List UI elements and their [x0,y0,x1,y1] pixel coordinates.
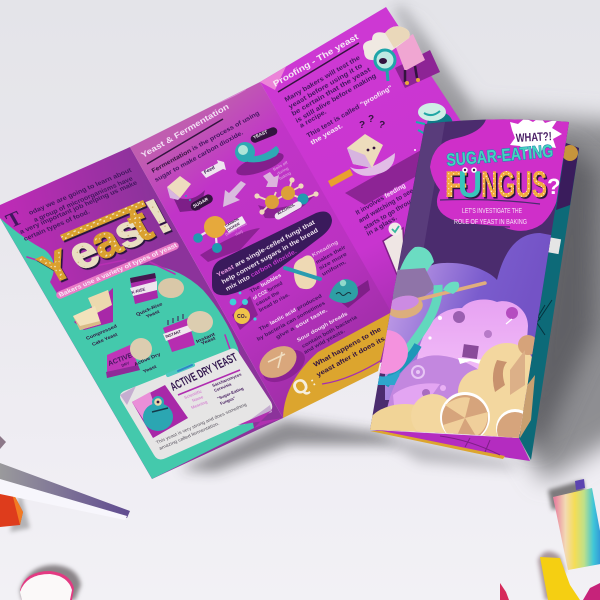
decorative magenta strokes [27,257,232,355]
text: sour dough: contain both bacteria [301,315,358,350]
fermentation text: sugar to make carbon dioxide. [153,129,245,184]
subtitle: LET'S INVESTIGATE THE [462,206,522,215]
icon: carbon dioxide molecule: rise) [234,229,244,237]
proofing text: yeast before using it to [288,62,364,111]
intro text: a very important job helping us make [18,179,139,236]
icon: dough and rolling pin [285,255,320,289]
label: instant [195,331,217,346]
text: feeding: It involves feeding [355,182,407,217]
icon: quick-rise jar [130,273,184,304]
panel: yeast and fermentation (middle) [130,82,412,418]
banner: question: yeast after it does its [315,335,387,379]
icon: carbon dioxide molecule: CARBON [225,217,240,228]
text: lactic acid: The lactic acid produced [258,293,323,333]
title: question mark: ? [547,174,560,199]
prop: pink gummy [583,583,600,600]
title: fungus: F [444,164,468,205]
text: lactic acid: by bacteria can sometimes [256,300,327,343]
prop: small candy fragment [0,436,6,449]
icon: active dry yeast packet [106,338,152,378]
prop: marshmallow [20,565,81,600]
title: Yeast!: t [118,197,161,252]
cover sky [385,233,556,400]
panel: yeast intro (left) [0,147,283,479]
label: compressed: Compressed [85,323,118,341]
text: kneading: size more [318,252,348,272]
icon: sourdough bread [254,340,310,389]
icon: question marks [359,114,386,131]
icon: carbon dioxide molecule: DIOXIDE [227,221,241,232]
arrow: to alcohol [263,172,279,187]
subtitle [440,200,540,227]
icon: cube in pan [328,134,445,205]
text: bubbles of CO2: cause the [255,290,281,308]
icon: umlaut eyes [462,167,477,173]
icon: glass with check [383,222,405,275]
text: sour dough: Sour dough breads [296,311,349,344]
proofing text: This test is called "proofing" [306,84,394,140]
card table [183,372,245,410]
text: kneading [311,240,348,278]
text: feeding: in a glass. [366,214,399,238]
label: quick-rise [135,301,164,319]
proofing text [284,54,394,147]
burst: what [510,117,562,153]
proofing text: a recipe. [299,108,328,130]
card table: Cerevisia [213,381,233,393]
banner: question: Q [288,374,313,400]
title: fungus: NGUS [481,164,547,205]
title: Yeast!: e [58,225,108,280]
magenta corner [238,410,283,428]
icon: yeast monster [234,126,286,180]
callout: yeast definition: Yeast are single-celled fungi that [215,219,316,279]
prop: red gummy edge [500,583,509,600]
text: bubbles of CO2 [249,273,291,314]
text: sour dough [296,311,358,356]
title: Yeast!: a [80,213,130,269]
icon: carbon dioxide molecule [193,216,260,262]
card title: ACTIVE DRY YEAST [168,350,240,394]
intro text: a group of microorganisms have [32,175,135,224]
cover texture [397,122,445,275]
prop: yellow gummy [538,551,580,600]
card table: Fungus" [219,395,236,406]
icon: CO2 bubbles [230,292,258,330]
proofing text: is still alive before making [295,72,378,125]
card description: amazing called fermentation. [158,421,220,451]
card table: "Sugar-Eating [216,386,245,401]
teal cascade [392,247,434,300]
text: kneading: makes their [315,245,347,266]
text: lactic acid: give a sour taste. [275,307,329,341]
arrow: sugar to carbon dioxide [223,181,246,207]
cover magenta blob [430,116,575,231]
card table: Meaning [190,399,209,410]
icon: question marks: ? [377,119,386,131]
arrow: feed [201,160,226,178]
callout: yeast definition [212,212,332,295]
label: active dry [133,351,162,374]
teal lower background [0,218,254,479]
subtitle: ROLE OF YEAST IN BAKING [454,217,527,226]
note: boils off: baking [278,170,292,181]
card: active dry yeast [120,349,272,459]
label: active dry: Yeast [142,364,158,374]
icon: quick-rise jar: K-RISE [131,286,146,295]
text: lactic acid [256,293,329,343]
pink candy cloud [400,300,528,440]
intro text [18,167,139,243]
teal pill [168,365,193,375]
pink circle [380,330,408,374]
note: boils off [272,160,292,181]
rock texture [390,268,435,315]
drop cap T: T [1,206,26,232]
note: boils off: during [276,165,290,176]
prop: tweezers [0,463,130,520]
heading [271,31,360,92]
lilac cloud [388,355,478,407]
icon: yeast monster: YEAST [252,129,268,140]
card table: Name [191,394,205,403]
icon: sugar cube: SUGAR [192,196,210,209]
title: sugar-eating: SUGAR-EATING [446,141,554,170]
icon: carbon dioxide molecule: (Makes bread [224,221,248,237]
icon: teal yeast behind cover [414,103,453,155]
fermentation text: Fermentation is the process of using [150,110,261,175]
title: fungus: U [458,164,482,205]
icon: wooden spoon [385,282,485,321]
text: kneading: uniform. [321,259,348,278]
text: bubbles of CO2: of CO2 formed [252,281,284,302]
heading [139,102,231,164]
burst: what: WHAT?! [515,129,552,145]
icon: sugar cube [167,176,214,212]
text: feeding: starts to go through [363,195,419,232]
card table: Saccharomyces [211,372,243,388]
callout: yeast definition: mix into carbon dioxide. [224,248,298,293]
label: instant: Yeast [200,335,217,346]
text: sour dough: and wild yeasts. [303,328,347,356]
panel: proofing (right) [260,7,461,310]
title: Yeast! [31,189,180,292]
icon: instant yeast packet [163,311,213,352]
icon: CO2 bubbles: CO₂ [237,314,247,320]
label: quick-rise: Yeast [145,309,161,319]
icon: question marks: ? [359,120,365,131]
label: instant: Instant [195,331,216,344]
card description: This yeast is very strong and does something [155,402,248,445]
proofing text: the yeast. [310,122,344,147]
layer: back folded panels under cover [370,143,579,461]
note: boils off: Boils off [272,160,289,172]
proofing text: be certain that the yeast [291,66,373,118]
banner: bakers use: Bakers use a variety of types of yeast [57,242,179,299]
icon: compressed cake yeast [73,288,113,330]
heading: Yeast & Fermentation [139,102,231,160]
banner: question: : [307,375,318,389]
icon: active dry yeast packet: DRY [121,360,130,368]
card table: Scientific [183,389,203,400]
prop: rainbow sour candy [548,479,600,570]
title: fungus [446,171,548,200]
icon: squashed yeast [329,279,370,308]
label: active dry: Active Dry [133,351,162,367]
icon: alcohol molecule [254,177,320,221]
banner: question [283,312,392,418]
text: bubbles of CO2: The bubbles [249,273,283,295]
cookies and dough [370,335,535,438]
text: kneading: Kneading [311,240,339,259]
heading: Proofing - The yeast [271,31,360,89]
candy details [422,307,518,397]
intro text: certain types of food. [22,209,91,243]
prop: red candy [0,486,30,532]
intro text: oday we are going to learn about [27,167,134,217]
arrow: feed: Feed [203,165,216,176]
icon: active dry yeast packet: ACTIVE [107,352,134,368]
icon: instant yeast packet: INSTANT [165,329,182,339]
text: bubbles of CO2: bread to rise. [258,292,291,314]
text: feeding [355,184,412,236]
icon: chef cube with magnifier [363,26,440,88]
cast shadows under brochure [180,6,600,482]
label: compressed: Cake Yeast [91,332,119,347]
text: feeding: and watching to see [358,187,415,225]
panel: front cover [370,119,569,438]
teal swirl [406,284,443,353]
monster portrait [132,385,188,438]
banner: question: What happens to the [312,326,383,369]
label: quick-rise: Quick-Rise [135,301,164,317]
title: Yeast!: Y [31,241,80,292]
title: Yeast!: ! [137,189,180,244]
icon: question marks: ? [368,114,374,125]
icon: alcohol molecule: ALCOHOL [276,202,296,216]
title: Yeast!: s [103,204,153,259]
callout: yeast definition: help convert sugars in the bread [220,227,320,286]
proofing text: Many bakers will test the [284,54,362,104]
label: compressed [85,323,119,347]
